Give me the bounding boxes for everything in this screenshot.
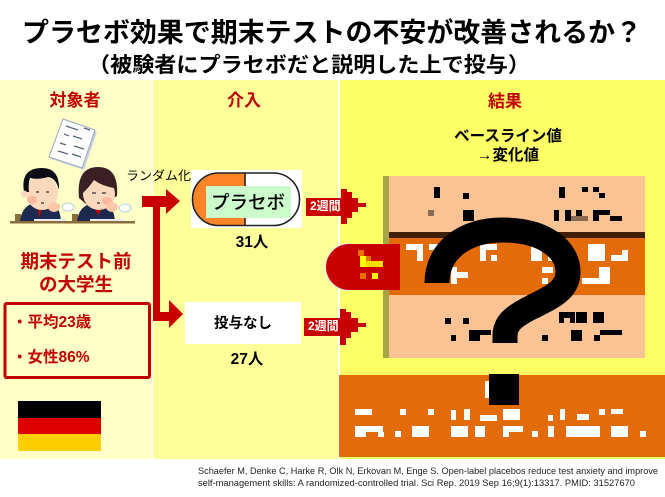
subtitle: （被験者にプラセボだと説明した上で投与）	[88, 54, 530, 77]
callout: demographics: ・平均23歳	[12, 313, 92, 331]
box: no treatment	[185, 302, 301, 344]
panel: target population: の大学生	[39, 274, 113, 295]
icon: red capsule	[326, 244, 400, 290]
label: placebo 31 people: 31人	[236, 234, 269, 251]
pixelated row two	[406, 244, 628, 284]
callout: demographics	[5, 304, 150, 378]
title: プラセボ効果で期末テストの不安が改善されるか？	[22, 17, 642, 48]
callout: demographics: ・女性86%	[12, 347, 90, 366]
citation	[198, 466, 658, 489]
arrow: two weeks no treatment: 2週間	[308, 318, 339, 333]
box: no treatment: 投与なし	[214, 314, 272, 332]
heading: intervention: 介入	[227, 91, 261, 110]
text: final-exam university students: 期末テスト前	[20, 251, 132, 272]
citation: self-management skills: A randomized-controlled trial. Sci Rep. 2019 Sep 16;9(1):13317. PMID: 31527670	[198, 478, 635, 489]
panel: intervention	[154, 80, 338, 459]
arrow: randomisation split	[142, 189, 183, 328]
heading: target population: 対象者	[50, 90, 100, 110]
icon: test paper	[49, 119, 97, 170]
panel: target population	[0, 80, 153, 459]
big question mark	[437, 230, 568, 343]
icon: worried students	[10, 167, 135, 224]
text: baseline to change: ベースライン値	[454, 127, 562, 145]
arrow: two weeks placebo: 2週間	[310, 198, 341, 213]
pixelated row one	[428, 187, 622, 221]
arrow: two weeks placebo	[306, 189, 366, 224]
panel: results: →変化値	[477, 145, 539, 164]
heading: results: 結果	[488, 92, 522, 111]
arrow: two weeks no treatment	[304, 309, 366, 345]
icon: placebo capsule	[191, 170, 302, 228]
panel: results	[326, 80, 665, 459]
icon: German flag	[18, 401, 101, 451]
label: randomisation: ランダム化	[126, 168, 192, 183]
pixelated row three	[445, 312, 622, 341]
table: pixelated results	[383, 176, 645, 358]
label: no treatment 27 people: 27人	[231, 351, 264, 368]
summary box: pixelated conclusion	[339, 374, 665, 457]
icon: placebo capsule: プラセボ	[211, 192, 285, 213]
citation: Schaefer M, Denke C, Harke R, Olk N, Erkovan M, Enge S. Open-label placebos reduce test anxiety and improve	[198, 466, 658, 477]
black square: question mark dot	[489, 374, 519, 405]
